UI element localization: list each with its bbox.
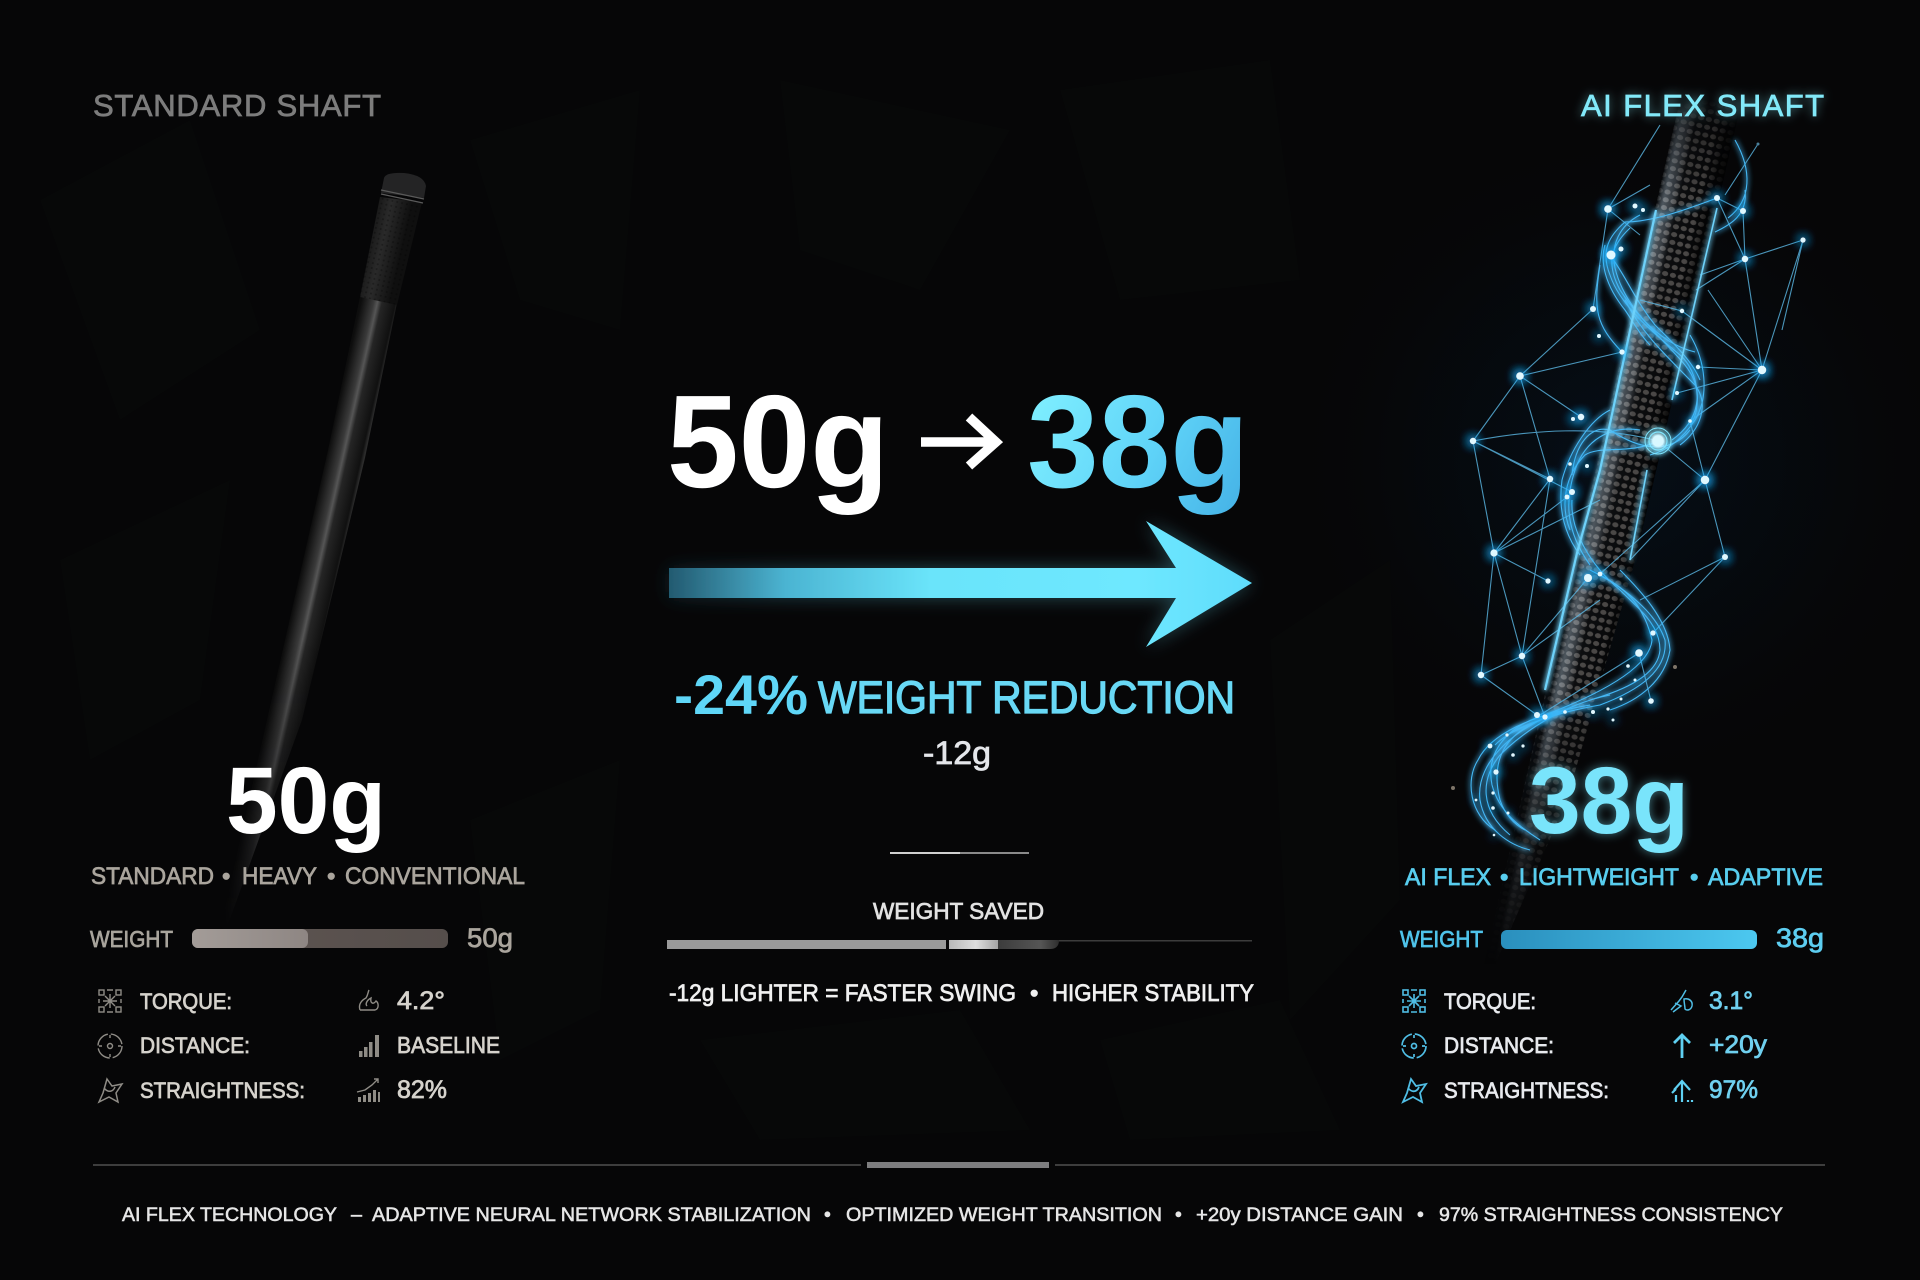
short divider: [890, 852, 1029, 854]
descriptor line: ADAPTIVE: [1708, 864, 1823, 891]
benefit statement: -12g LIGHTER = FASTER SWING: [669, 980, 1016, 1007]
neural network lines: [1473, 125, 1803, 717]
weight bar: 50g: [467, 923, 513, 953]
weight figure: 50g: [226, 748, 386, 854]
footer summary: ADAPTIVE NEURAL NETWORK STABILIZATION: [372, 1204, 811, 1226]
benefit statement: HIGHER STABILITY: [1052, 980, 1254, 1007]
descriptor line: [1405, 864, 1823, 891]
weight figure: 38g: [1529, 748, 1689, 854]
weight saved bar: [667, 940, 1252, 949]
heading: standard shaft: STANDARD SHAFT: [93, 88, 381, 123]
stat: straightness: STRAIGHTNESS:: [1444, 1078, 1609, 1103]
stat: straightness: STRAIGHTNESS:: [140, 1078, 305, 1103]
network nodes: [1470, 195, 1806, 836]
stat: straightness: [99, 1076, 447, 1104]
stat: torque: TORQUE:: [1444, 989, 1536, 1014]
weight bar: 38g: [1776, 923, 1824, 953]
weight bar: [90, 923, 513, 953]
shaft edge highlights: [1545, 208, 1717, 690]
stats list: [98, 987, 500, 1104]
illustration: carbon shaft: [1504, 104, 1728, 930]
descriptor line: •: [222, 863, 230, 890]
headline: 50g to 38g: [667, 368, 1249, 515]
weight reduction callout: [674, 663, 1235, 726]
highlighted core node: [1645, 428, 1671, 454]
descriptor line: •: [1500, 864, 1508, 891]
descriptor line: •: [1690, 864, 1698, 891]
stat: straightness: 82%: [397, 1076, 447, 1104]
panel: standard shaft: [90, 88, 525, 1104]
footer summary: –: [351, 1204, 362, 1226]
footer summary: OPTIMIZED WEIGHT TRANSITION: [846, 1204, 1162, 1226]
weight reduction callout: WEIGHT REDUCTION: [818, 672, 1235, 723]
footer summary: AI FLEX TECHNOLOGY: [122, 1204, 337, 1226]
weight bar: WEIGHT: [1400, 926, 1483, 952]
dim particles: [1451, 142, 1760, 790]
stat: distance: +20y: [1709, 1031, 1768, 1059]
stat: distance: DISTANCE:: [140, 1033, 250, 1058]
stat: straightness: [1403, 1076, 1758, 1104]
panel: centre comparison: [667, 368, 1254, 1007]
helical light wires: [1471, 140, 1747, 850]
descriptor line: •: [327, 863, 335, 890]
stat: torque: 3.1°: [1709, 987, 1753, 1015]
footer divider: [93, 1162, 1825, 1168]
benefit statement: [669, 980, 1254, 1007]
stat: torque: 4.2°: [397, 987, 445, 1015]
stat: torque: TORQUE:: [140, 989, 232, 1014]
illustration: standard golf shaft: [240, 173, 426, 887]
weight bar: [1400, 923, 1824, 953]
stat: distance: [98, 1032, 500, 1058]
descriptor line: LIGHTWEIGHT: [1519, 864, 1679, 891]
large transition arrow: [669, 521, 1252, 647]
weight saved label: WEIGHT SAVED: [873, 898, 1044, 924]
heading: AI flex shaft: AI FLEX SHAFT: [1581, 88, 1824, 123]
stats list: [1402, 987, 1768, 1104]
footer summary: •: [1417, 1204, 1424, 1226]
footer summary: +20y DISTANCE GAIN: [1196, 1204, 1403, 1226]
descriptor line: HEAVY: [242, 863, 317, 890]
descriptor line: AI FLEX: [1405, 864, 1491, 891]
grams saved: -12g: [923, 735, 991, 771]
headline: 50g to 38g: 38g: [1027, 368, 1249, 515]
footer summary: •: [824, 1204, 831, 1226]
footer summary: [122, 1204, 1783, 1226]
stat: straightness: 97%: [1709, 1076, 1758, 1104]
weight reduction callout: -24%: [674, 663, 808, 726]
footer summary: •: [1175, 1204, 1182, 1226]
headline: 50g to 38g: 50g: [667, 368, 889, 515]
stat: distance: BASELINE: [397, 1032, 500, 1058]
stat: torque: [99, 987, 445, 1015]
panel: AI flex shaft: [1400, 88, 1824, 1104]
stat: torque: [1403, 987, 1753, 1015]
descriptor line: STANDARD: [91, 863, 214, 890]
weight bar: WEIGHT: [90, 926, 173, 952]
descriptor line: CONVENTIONAL: [345, 863, 525, 890]
benefit statement: •: [1030, 980, 1038, 1007]
stat: distance: DISTANCE:: [1444, 1033, 1554, 1058]
stat: distance: [1402, 1031, 1768, 1059]
footer summary: 97% STRAIGHTNESS CONSISTENCY: [1439, 1204, 1783, 1226]
descriptor line: [91, 863, 525, 890]
